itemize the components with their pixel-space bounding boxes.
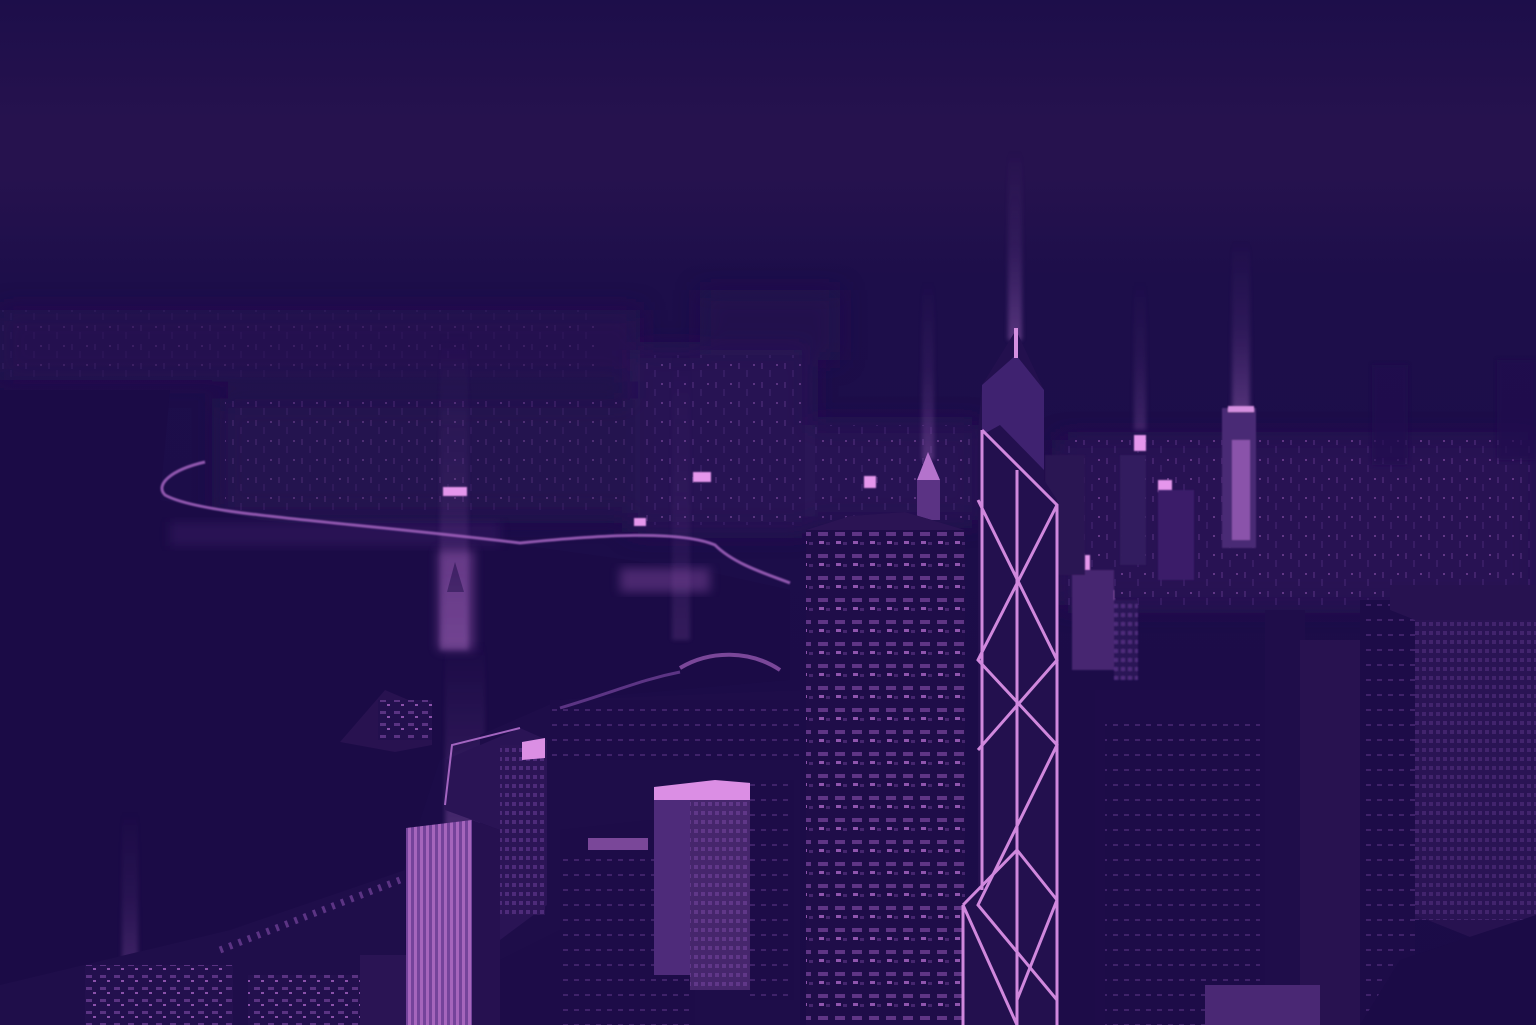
distant hillside city haze	[0, 290, 1536, 605]
glass tower with pink sign	[445, 728, 547, 940]
right midtown towers	[1045, 406, 1256, 680]
central hong kong shore buildings	[340, 655, 800, 1025]
right foreground skyscrapers	[1060, 585, 1536, 1025]
shoreline road	[162, 462, 790, 583]
bank of china tower	[963, 328, 1057, 1025]
small spire tower	[917, 452, 940, 520]
lower left district	[0, 870, 460, 1025]
large dark skyscraper	[806, 512, 965, 1025]
dark foreground tower	[500, 820, 695, 1025]
distant city lights	[0, 310, 1536, 605]
bright rooftop block	[654, 780, 794, 1000]
white striped office tower	[406, 820, 500, 1025]
light beams	[122, 150, 1250, 980]
midtown glowing signs	[443, 435, 1172, 602]
harbour water	[0, 390, 790, 985]
